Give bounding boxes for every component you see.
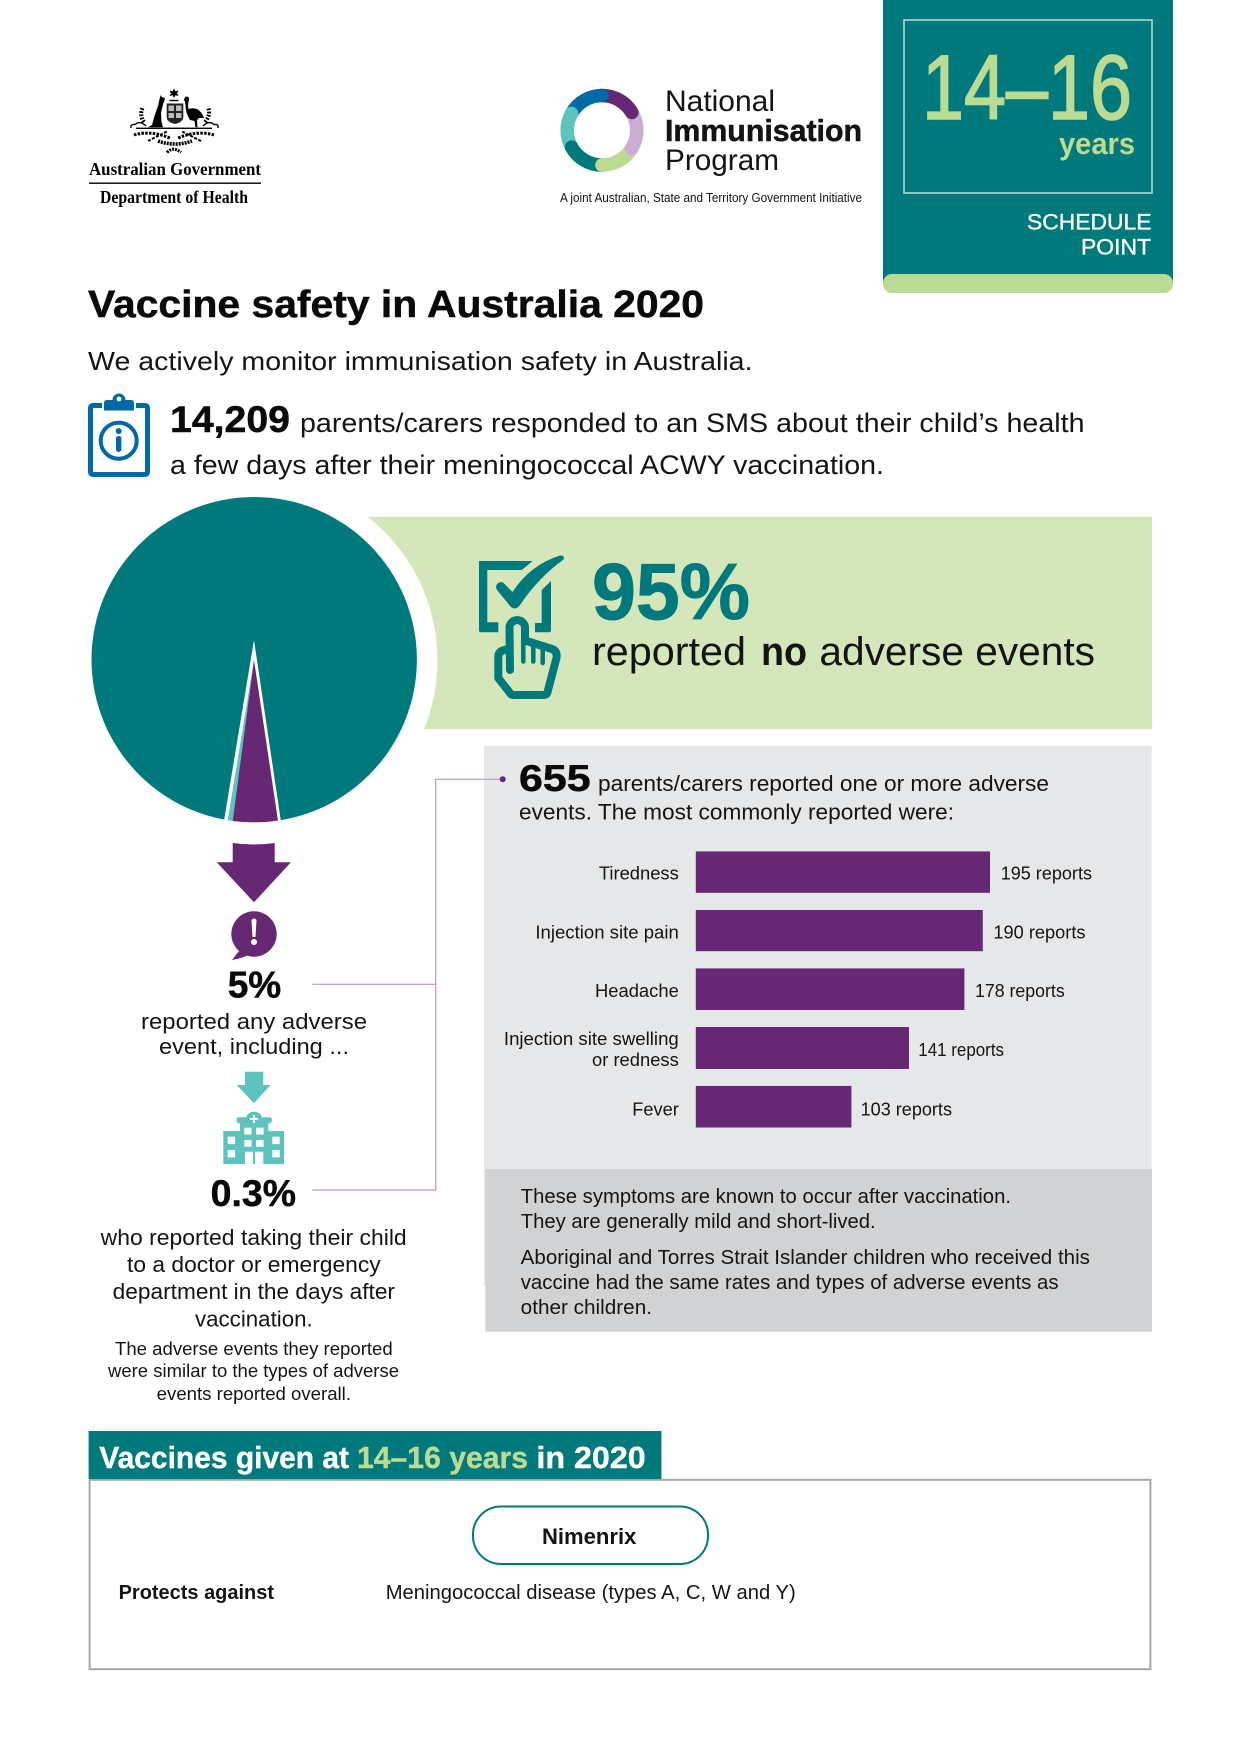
pie chart: 95% no adverse events, 5% any adverse event	[92, 497, 417, 828]
note: Aboriginal and Torres Strait Islander children: vaccine had the same rates and types of adverse events as	[521, 1271, 1059, 1294]
big number: 95%: 95%	[592, 547, 750, 636]
bar: injection site swelling or redness 141: Injection site swelling	[504, 1029, 679, 1049]
bar: tiredness 195	[599, 851, 1092, 893]
heading: 655 parents/carers: parents/carers reported one or more adverse	[598, 771, 1049, 796]
schedule label: SCHEDULE	[1027, 210, 1152, 234]
heading: 655 parents/carers	[519, 758, 1049, 824]
bar: fever 103	[632, 1086, 952, 1128]
wordmark: Department of Health: Department of Health	[100, 187, 248, 207]
National Immunisation Program logo	[560, 85, 862, 205]
wordmark: Immunisation: Immunisation	[665, 113, 862, 148]
connector lines from stats to panel	[312, 776, 506, 1190]
years label: years	[1059, 126, 1135, 161]
tagline: A joint Australian, State and Territory Government Initiative	[560, 191, 862, 205]
bar: injection site swelling or redness 141	[504, 1027, 1004, 1070]
subtitle: We actively monitor immunisation safety in Australia.	[88, 346, 752, 376]
foliage of coat of arms	[131, 107, 218, 152]
wordmark: National: National	[665, 85, 775, 118]
vaccine pill: Nimenrix: Nimenrix	[542, 1524, 637, 1549]
Australian Government logo	[89, 88, 261, 207]
sentence line two: a few days after their meningococcal ACWY vaccination.	[170, 450, 884, 480]
wordmark: Program: Program	[665, 144, 779, 177]
heading: 655 parents/carers: events. The most commonly reported were:	[519, 799, 954, 824]
bar: tiredness 195: Tiredness	[599, 863, 679, 883]
caption: who reported taking their child	[100, 1225, 407, 1250]
number: 0.3%: 0.3%	[211, 1173, 296, 1214]
caption: reported no adverse events	[592, 630, 1095, 674]
bar: injection site pain 190	[535, 910, 1086, 951]
label: protects against: Protects against	[119, 1582, 274, 1604]
note: symptoms known: They are generally mild and short-lived.	[521, 1210, 876, 1233]
note: similar adverse events: events reported overall.	[157, 1384, 351, 1404]
wordmark: Australian Government: Australian Government	[89, 159, 261, 179]
bar: injection site pain 190: Injection site pain	[535, 922, 679, 942]
stat: 5 percent	[141, 965, 367, 1059]
value: meningococcal disease: Meningococcal disease (types A, C, W and Y)	[386, 1581, 796, 1604]
panel: 95 percent callout	[368, 517, 1152, 729]
caption: reported no adverse events: adverse events	[819, 630, 1095, 674]
heading bar	[89, 1431, 661, 1479]
bar: injection site pain 190: 190 reports	[993, 922, 1086, 942]
slice: doctor or emergency	[228, 660, 254, 821]
heading bar: Vaccines given at	[99, 1440, 349, 1475]
note: Aboriginal and Torres Strait Islander children: Aboriginal and Torres Strait Islander children who received this	[521, 1246, 1090, 1269]
heading: 655 parents/carers: 655	[519, 758, 591, 799]
caption: department in the days after	[113, 1279, 395, 1304]
note: similar adverse events: The adverse events they reported	[115, 1339, 393, 1359]
heading bar: in 2020	[536, 1440, 646, 1475]
panel: schedule point tab	[883, 0, 1173, 293]
caption line one: reported any adverse	[141, 1009, 367, 1034]
note: Aboriginal and Torres Strait Islander children: other children.	[521, 1296, 652, 1319]
bar: headache 178: 178 reports	[975, 981, 1065, 1001]
caption: reported no adverse events: no	[761, 630, 807, 674]
sentence line one: parents/carers responded to an SMS about their child’s health	[300, 408, 1084, 438]
slice: no adverse events	[92, 497, 417, 822]
stat: 0.3 percent	[100, 1173, 407, 1404]
icon: clipboard with info symbol	[90, 394, 148, 474]
age range: 14–16	[922, 37, 1132, 139]
caption: reported no adverse events: reported	[592, 630, 746, 674]
text block: respondents	[170, 399, 1084, 480]
bar: headache 178: Headache	[595, 981, 679, 1001]
caption line two: event, including ...	[159, 1034, 349, 1059]
caption: vaccination.	[195, 1307, 313, 1332]
note: symptoms known: These symptoms are known to occur after vaccination.	[521, 1185, 1011, 1208]
note: similar adverse events	[107, 1339, 399, 1404]
icon: hospital	[223, 1112, 284, 1164]
bar: fever 103: Fever	[632, 1100, 679, 1120]
title: Vaccine safety in Australia 2020	[88, 284, 704, 326]
point label: POINT	[1081, 234, 1151, 260]
icon: coloured ring	[567, 96, 637, 165]
note: similar adverse events: were similar to the types of adverse	[107, 1361, 399, 1381]
bar: injection site swelling or redness 141: or redness	[592, 1050, 679, 1070]
bar: injection site swelling or redness 141: 141 reports	[918, 1040, 1004, 1060]
number: 14,209: 14,209	[170, 399, 290, 440]
vaccine pill: Nimenrix	[473, 1506, 708, 1564]
caption	[100, 1225, 407, 1332]
icon: speech bubble with exclamation	[231, 911, 277, 960]
number: 5%: 5%	[228, 965, 281, 1006]
caption: to a doctor or emergency	[127, 1252, 381, 1277]
bar: tiredness 195: 195 reports	[1001, 863, 1092, 883]
arrow: purple down	[217, 843, 291, 902]
slice: adverse event	[233, 660, 278, 822]
note: symptoms known	[521, 1185, 1011, 1233]
bar: fever 103: 103 reports	[861, 1100, 952, 1120]
heading bar: 14–16 years	[357, 1440, 528, 1475]
bar chart: most common adverse events	[504, 851, 1092, 1128]
bar: headache 178	[595, 968, 1065, 1010]
panel: adverse events detail	[484, 746, 1152, 1332]
arrow: aqua down	[237, 1072, 271, 1103]
note: Aboriginal and Torres Strait Islander children	[521, 1246, 1090, 1319]
icon: checkbox and pointing hand	[479, 555, 564, 695]
panel: vaccines given	[89, 1431, 1150, 1669]
icon: coat of arms	[131, 88, 218, 152]
